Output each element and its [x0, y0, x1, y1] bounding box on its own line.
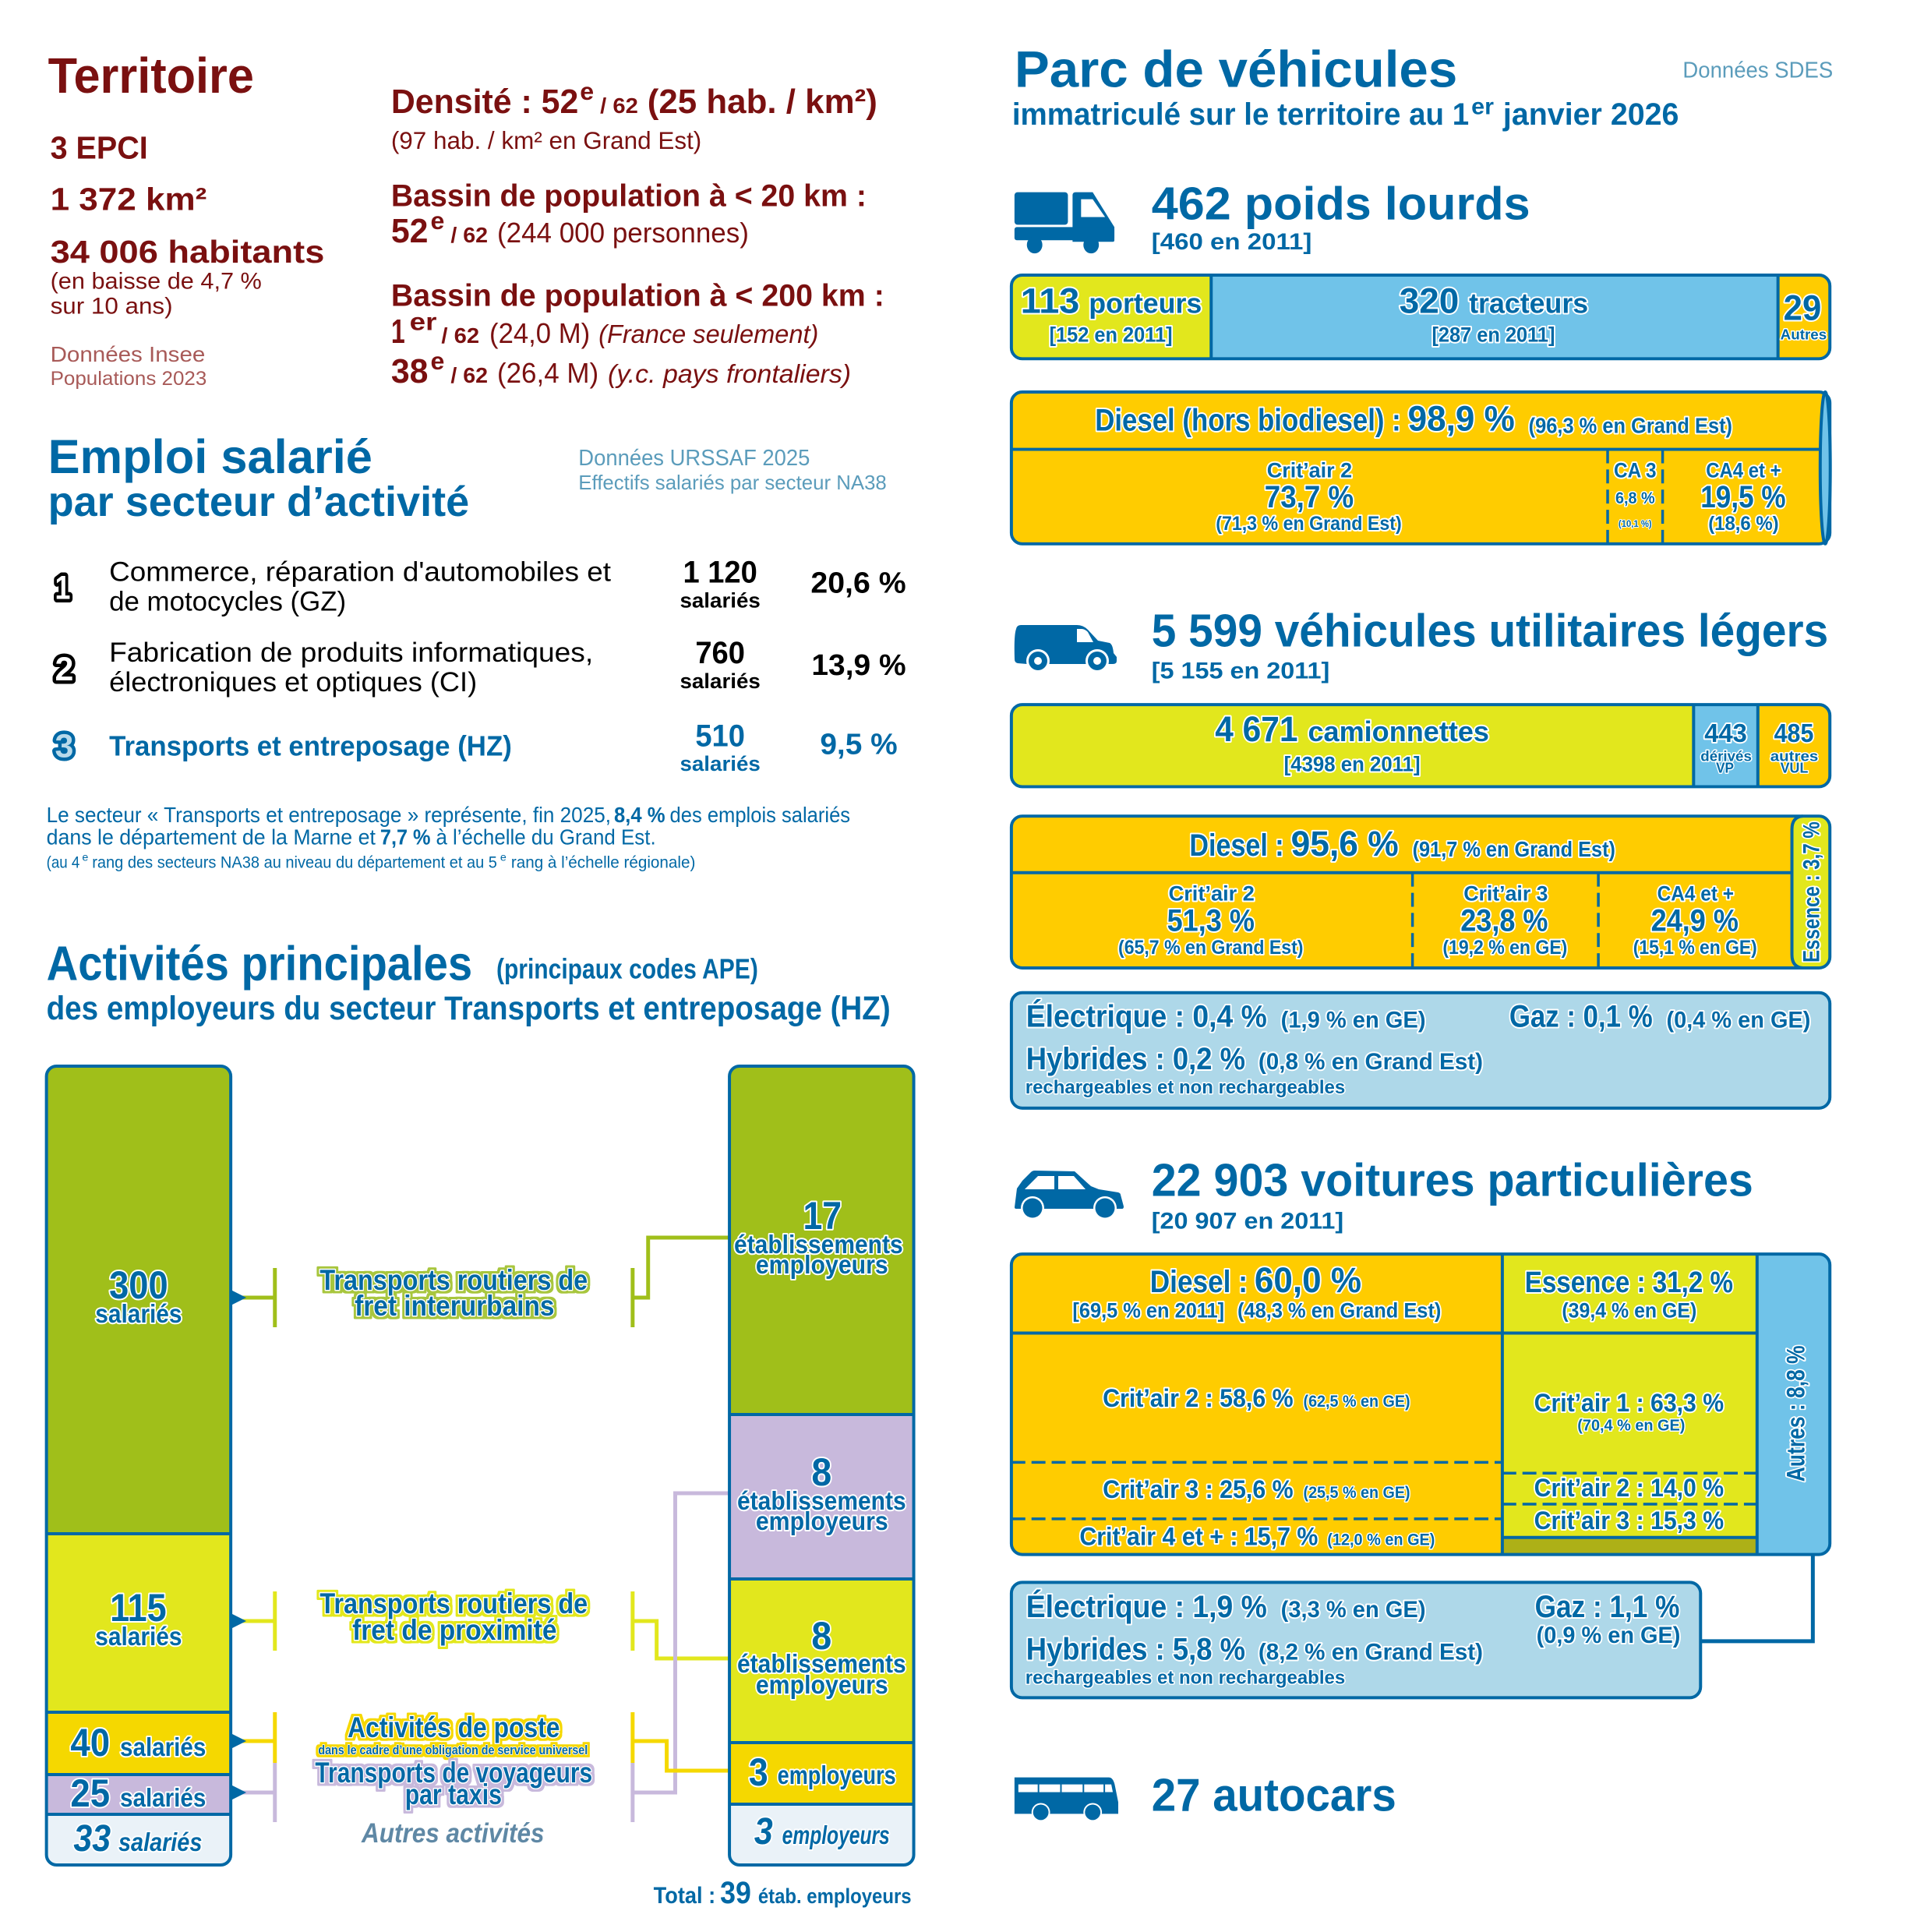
value: 115 salariés: salariés	[95, 1622, 182, 1651]
value: 8 établissements proximité: établissements	[737, 1649, 906, 1678]
segment: CA 3	[1614, 458, 1657, 529]
text: bassin 20 km: (244 000 personnes)	[497, 217, 749, 249]
segment: porteurs: porteurs	[1089, 288, 1202, 320]
heading: activités principales	[47, 936, 891, 1027]
text: total établissements	[654, 1876, 912, 1910]
value: 300 salariés: 300	[109, 1263, 168, 1307]
callout: autres énergies voitures	[1011, 1582, 1700, 1697]
row: transports	[109, 719, 898, 775]
heading: activités principales: Activités principales	[47, 936, 472, 991]
segment: camionnettes: camionnettes	[1308, 716, 1489, 747]
heading: emploi salarié	[48, 430, 469, 525]
value: 115 salariés: 115	[110, 1586, 167, 1630]
row: transports: 9,5 %	[820, 728, 898, 761]
heading: véhicules utilitaires légers: 5 599 véhicules utilitaires légers	[1152, 605, 1828, 657]
icon: autocar	[1015, 1778, 1118, 1821]
segment: dérivés VP: dérivés	[1700, 749, 1752, 765]
panel: activités principales	[47, 936, 914, 1910]
text: note transports: e	[82, 850, 89, 863]
label: transports de voyageurs: Transports de voyageurs	[315, 1757, 592, 1789]
value: 8 établissements proximité: employeurs	[756, 1670, 888, 1699]
segment: autres: 29	[1784, 288, 1821, 328]
callout: autres énergies utilitaires: Gaz : 0,1 %	[1509, 999, 1653, 1033]
segment: diesel: Diesel :	[1150, 1265, 1248, 1299]
text: baisse population: (en baisse de 4,7 %	[51, 269, 262, 295]
segment: diesel crit'air 3: Crit’air 3 : 25,6 %	[1103, 1475, 1294, 1503]
segment: crit'air 2: (71,3 % en Grand Est)	[1216, 514, 1402, 535]
text: densité: e	[580, 77, 594, 105]
heading: poids lourds: [460 en 2011]	[1152, 229, 1311, 255]
segment: diesel: [69,5 % en 2011]	[1072, 1299, 1224, 1323]
text: total établissements: 39	[720, 1876, 751, 1910]
source: URSSAF	[578, 446, 887, 494]
heading: activités principales: des employeurs du secteur Transports et entreposage (HZ)	[47, 990, 891, 1027]
segment: porteurs: 113	[1021, 281, 1079, 321]
callout: autres énergies voitures: Électrique : 1,9 %	[1026, 1588, 1267, 1624]
segment: autres VUL: autres	[1770, 749, 1818, 765]
segment: camionnettes: 4 671	[1215, 709, 1298, 749]
text: baisse population	[51, 269, 262, 319]
text: note transports: Le secteur « Transports et entreposage » représente, fin 2025,	[47, 803, 611, 827]
segment: crit'air 2	[1216, 458, 1402, 535]
heading: autocars: 27 autocars	[1152, 1768, 1396, 1821]
icon: rang 3: 3	[55, 727, 73, 765]
row: commerce: 20,6 %	[810, 567, 906, 600]
text: note transports: à l’échelle du Grand Est.	[436, 825, 656, 849]
callout: autres énergies utilitaires: Hybrides : 0,2 %	[1026, 1042, 1245, 1076]
text: bassin 200 km: / 62	[441, 323, 479, 348]
text: bassin 200 km: (26,4 M)	[497, 358, 598, 389]
chart: barre établissements	[729, 1066, 914, 1865]
icon: voiture	[1015, 1171, 1124, 1220]
heading: véhicules utilitaires légers: [5 155 en 2011]	[1152, 658, 1329, 683]
segment: essence crit'air 2: Crit’air 2 : 14,0 %	[1534, 1473, 1724, 1502]
text: densité: / 62	[600, 94, 638, 118]
row: fabrication: Fabrication de produits informatiques,	[109, 638, 593, 668]
segment: dérivés VP	[1700, 719, 1752, 777]
value: 300 salariés: salariés	[95, 1299, 182, 1328]
segment: essence crit'air 1: (70,4 % en GE)	[1577, 1418, 1685, 1435]
row: commerce: de motocycles (GZ)	[109, 587, 346, 616]
label: fret de proximité	[319, 1588, 588, 1646]
row: commerce: 1 120	[683, 556, 757, 590]
chart: barre salariés	[47, 1066, 231, 1865]
value: 40 salariés: salariés	[120, 1732, 206, 1761]
stat: surface: 1 372 km²	[51, 181, 207, 217]
value: 17 établissements: 17	[803, 1194, 842, 1238]
panel: parc de véhicules	[1011, 41, 1833, 1821]
text: note transports: des emplois salariés	[670, 803, 850, 827]
heading: voitures particulières: [20 907 en 2011]	[1152, 1208, 1343, 1234]
heading: territoire: Territoire	[48, 48, 254, 104]
segment: autres: Autres	[1781, 327, 1827, 343]
segment: crit'air 2: Crit’air 2	[1267, 458, 1352, 482]
segment: diesel: Diesel :	[1189, 828, 1284, 863]
segment: diesel: (48,3 % en Grand Est)	[1237, 1299, 1441, 1323]
row: commerce: salariés	[680, 589, 761, 613]
segment: diesel	[1095, 399, 1732, 439]
value: 8 établissements transports voyageurs: 8	[811, 1450, 831, 1494]
segment: diesel crit'air 3: (25,5 % en GE)	[1304, 1484, 1410, 1502]
segment: diesel crit'air 4: (12,0 % en GE)	[1327, 1531, 1435, 1549]
heading: véhicules utilitaires légers	[1152, 605, 1828, 683]
segment: tracteurs: 320	[1400, 281, 1459, 321]
source: URSSAF: Données URSSAF 2025	[578, 446, 810, 471]
segment: dérivés VP: 443	[1704, 719, 1747, 748]
row: fabrication: salariés	[680, 669, 761, 693]
segment: CA 3: CA 3	[1614, 458, 1657, 482]
text: bassin 20 km: Bassin de population à < 20 km :	[391, 178, 867, 213]
segment: CA4 et +	[1700, 458, 1786, 535]
callout: autres énergies utilitaires: rechargeables et non rechargeables	[1026, 1077, 1345, 1098]
segment: crit'air 2	[1118, 882, 1304, 959]
label: fret de proximité: fret de proximité	[352, 1614, 556, 1646]
row: fabrication: 13,9 %	[811, 649, 906, 682]
text: bassin 200 km: Bassin de population à < 200 km :	[391, 279, 884, 313]
callout: autres énergies utilitaires: Électrique : 0,4 %	[1026, 998, 1267, 1033]
value: 40 salariés	[70, 1721, 206, 1764]
value: 300 salariés	[95, 1263, 182, 1328]
heading: parc de véhicules: er	[1471, 94, 1494, 119]
segment: diesel: 60,0 %	[1255, 1260, 1361, 1300]
value: 33 salariés: 33	[73, 1818, 111, 1860]
text: bassin 200 km: (24,0 M)	[489, 318, 590, 349]
value: 17 établissements: employeurs	[756, 1250, 888, 1279]
chart: connecteurs	[231, 1238, 729, 1822]
segment: CA4 et +	[1633, 882, 1757, 959]
label: autres activités: Autres activités	[361, 1818, 545, 1849]
value: 17 établissements	[734, 1194, 903, 1279]
text: note transports: e	[500, 850, 507, 863]
row: fabrication	[109, 636, 906, 698]
text: note transports: 8,4 %	[614, 803, 665, 827]
heading: voitures particulières	[1152, 1154, 1753, 1234]
text: bassin 200 km: e	[430, 347, 444, 375]
segment: crit'air 3: 23,8 %	[1460, 903, 1548, 938]
callout: autres énergies voitures: (0,9 % en GE)	[1537, 1623, 1680, 1648]
text: total établissements: Total :	[654, 1883, 715, 1909]
label: fret interurbains: fret interurbains	[355, 1290, 554, 1322]
row: commerce	[109, 556, 906, 616]
text: bassin 200 km: (y.c. pays frontaliers)	[608, 359, 851, 389]
segment: essence crit'air 1	[1534, 1388, 1724, 1435]
segment: CA4 et +: CA4 et +	[1706, 458, 1781, 482]
segment: diesel crit'air 2: Crit’air 2 : 58,6 %	[1103, 1383, 1294, 1412]
value: 8 établissements transports voyageurs	[737, 1450, 906, 1535]
segment: diesel: 98,9 %	[1408, 399, 1515, 439]
chart: répartition utilitaires	[1011, 705, 1830, 786]
segment: autres	[1781, 288, 1827, 343]
label: activités de poste: dans le cadre d’une obligation de service universel	[318, 1743, 588, 1757]
connector: autres vers encadré	[1700, 1555, 1813, 1641]
heading: voitures particulières: 22 903 voitures particulières	[1152, 1154, 1753, 1206]
segment: CA4 et +: (18,6 %)	[1708, 514, 1779, 535]
heading: parc de véhicules: immatriculé sur le territoire au 1	[1012, 97, 1469, 132]
heading: emploi salarié: par secteur d’activité	[48, 479, 469, 525]
segment: CA4 et +: CA4 et +	[1657, 882, 1734, 906]
text: densité: (25 hab. / km²)	[648, 83, 877, 121]
chart: libellés activités	[315, 1264, 592, 1849]
callout: autres énergies utilitaires: (1,9 % en GE)	[1281, 1007, 1426, 1033]
source: Insee: Données Insee	[51, 342, 205, 366]
segment: diesel crit'air 2	[1103, 1383, 1410, 1412]
segment: crit'air 3	[1442, 882, 1567, 959]
segment: crit'air 3: Crit’air 3	[1463, 882, 1548, 906]
icon: rang 2: 2	[55, 651, 73, 688]
heading: activités principales: (principaux codes APE)	[496, 954, 758, 985]
text: bassin 200 km: 38	[391, 352, 429, 390]
chart: carburant utilitaires	[1011, 816, 1830, 968]
segment: diesel crit'air 2: (62,5 % en GE)	[1304, 1393, 1410, 1411]
text: note transports: (au 4	[47, 853, 79, 871]
row: fabrication: électroniques et optiques (CI)	[109, 668, 477, 698]
segment: autres VUL: 485	[1774, 719, 1813, 748]
text: bassin 200 km	[391, 279, 884, 390]
segment: essence: Essence : 31,2 %	[1525, 1266, 1733, 1299]
segment: CA4 et +: 24,9 %	[1651, 903, 1739, 938]
value: 3 employeurs poste: 3	[749, 1750, 768, 1794]
value: 3 employeurs autres: 3	[754, 1811, 773, 1853]
segment: autres VUL	[1770, 719, 1818, 777]
segment: crit'air 2: 73,7 %	[1265, 480, 1354, 514]
value: 40 salariés: 40	[70, 1721, 110, 1764]
chart: répartition poids lourds	[1011, 275, 1830, 358]
text: bassin 20 km: 52	[391, 212, 429, 250]
value: 8 établissements transports voyageurs: établissements	[737, 1486, 906, 1515]
icon: utilitaire léger	[1015, 625, 1117, 673]
text: note transports: 7,7 %	[380, 825, 430, 849]
text: bassin 20 km	[391, 178, 867, 250]
label: activités de poste	[318, 1711, 588, 1757]
callout: autres énergies voitures: rechargeables et non rechargeables	[1026, 1667, 1345, 1688]
text: note transports: rang des secteurs NA38 au niveau du département et au 5	[92, 853, 497, 871]
panel: territoire	[48, 48, 884, 390]
chart: carburant poids lourds	[1011, 392, 1830, 544]
segment: essence: (39,4 % en GE)	[1562, 1299, 1696, 1323]
segment: crit'air 2: (65,7 % en Grand Est)	[1118, 938, 1304, 959]
segment: CA4 et +: (15,1 % en GE)	[1633, 938, 1757, 959]
label: transports de voyageurs	[315, 1757, 592, 1810]
segment: diesel	[1072, 1260, 1441, 1323]
heading: emploi salarié: Emploi salarié	[48, 430, 372, 484]
row: commerce: Commerce, réparation d'automobiles et	[109, 558, 611, 588]
segment: camionnettes: [4398 en 2011]	[1284, 753, 1421, 776]
value: 8 établissements proximité	[737, 1614, 906, 1699]
segment: tracteurs	[1400, 281, 1588, 346]
value: 3 employeurs poste: employeurs	[778, 1761, 896, 1789]
segment: autres VUL: VUL	[1781, 761, 1808, 777]
label: fret de proximité: Transports routiers de	[319, 1588, 588, 1619]
value: 25 salariés: 25	[70, 1771, 110, 1815]
text: bassin 200 km: 1	[391, 313, 405, 351]
callout: autres énergies voitures: (3,3 % en GE)	[1281, 1597, 1426, 1623]
segment: crit'air 3: (19,2 % en GE)	[1442, 938, 1567, 959]
value: 17 établissements: établissements	[734, 1230, 903, 1259]
segment: tracteurs: [287 en 2011]	[1431, 323, 1555, 346]
heading: poids lourds: 462 poids lourds	[1152, 177, 1530, 229]
segment: autres: Autres : 8,8 %	[1781, 1345, 1809, 1482]
segment: crit'air 2: 51,3 %	[1167, 903, 1255, 938]
callout: autres énergies voitures: Hybrides : 5,8 %	[1026, 1633, 1245, 1667]
segment: diesel: (96,3 % en Grand Est)	[1529, 414, 1732, 438]
value: 115 salariés	[95, 1586, 182, 1651]
segment: diesel crit'air 3	[1103, 1475, 1410, 1503]
stat: habitants: 34 006 habitants	[51, 234, 324, 270]
value: 33 salariés	[73, 1818, 202, 1860]
row: fabrication: 760	[695, 636, 745, 670]
callout: autres énergies utilitaires: (0,8 % en Grand Est)	[1259, 1049, 1483, 1075]
callout: autres énergies voitures: Gaz : 1,1 %	[1535, 1590, 1679, 1624]
text: bassin 200 km: (France seulement)	[598, 320, 818, 349]
panel: emploi salarié	[47, 430, 906, 871]
text: note transports: dans le département de la Marne et	[47, 825, 376, 849]
callout: autres énergies utilitaires: (0,4 % en GE)	[1667, 1007, 1810, 1033]
segment: essence: Essence : 3,7 %	[1799, 821, 1824, 962]
value: 33 salariés: salariés	[118, 1828, 202, 1856]
row: transports: 510	[695, 719, 745, 753]
source: URSSAF: Effectifs salariés par secteur NA38	[578, 472, 887, 494]
heading: parc de véhicules	[1012, 41, 1679, 132]
segment: diesel: (91,7 % en Grand Est)	[1413, 837, 1615, 861]
text: note transports	[47, 803, 850, 871]
text: note transports: rang à l’échelle régionale)	[511, 853, 695, 871]
segment: crit'air 2: Crit’air 2	[1169, 882, 1255, 906]
source: Insee	[51, 342, 207, 390]
stat: EPCI: 3 EPCI	[51, 130, 148, 166]
segment: essence crit'air 3: Crit’air 3 : 15,3 %	[1534, 1506, 1724, 1535]
value: 3 employeurs autres: employeurs	[782, 1821, 890, 1849]
segment: diesel: 95,6 %	[1291, 824, 1399, 864]
segment: porteurs: [152 en 2011]	[1050, 323, 1173, 346]
label: activités de poste: Activités de poste	[348, 1711, 560, 1743]
callout: autres énergies utilitaires	[1011, 993, 1830, 1108]
source: Insee: Populations 2023	[51, 369, 207, 390]
value: 3 employeurs poste	[749, 1750, 896, 1794]
text: bassin 20 km: / 62	[450, 223, 488, 247]
text: total établissements: étab. employeurs	[758, 1884, 912, 1908]
value: 25 salariés: salariés	[120, 1783, 206, 1812]
label: fret interurbains: Transports routiers de	[319, 1264, 588, 1296]
value: 25 salariés	[70, 1771, 206, 1815]
segment: porteurs	[1021, 281, 1202, 346]
segment: essence crit'air 1: Crit’air 1 : 63,3 %	[1534, 1388, 1724, 1417]
text: bassin 20 km: e	[430, 207, 444, 235]
segment: diesel: Diesel (hors biodiesel) :	[1095, 404, 1401, 438]
row: transports: salariés	[680, 752, 761, 775]
label: transports de voyageurs: par taxis	[405, 1778, 502, 1810]
text: densité: (97 hab. / km² en Grand Est)	[391, 126, 701, 154]
value: 8 établissements proximité: 8	[811, 1614, 831, 1658]
segment: diesel crit'air 4: Crit’air 4 et + : 15,7 %	[1079, 1522, 1318, 1551]
segment: tracteurs: tracteurs	[1469, 288, 1588, 320]
source: SDES: Données SDES	[1682, 58, 1833, 83]
row: transports: Transports et entreposage (HZ)	[109, 730, 512, 761]
callout: autres énergies voitures: (8,2 % en Grand Est)	[1259, 1640, 1483, 1665]
text: baisse population: sur 10 ans)	[51, 293, 173, 319]
heading: poids lourds	[1152, 177, 1530, 255]
segment: diesel	[1189, 824, 1615, 864]
value: 3 employeurs autres	[754, 1811, 890, 1853]
text: bassin 200 km: / 62	[450, 363, 488, 387]
heading: parc de véhicules: Parc de véhicules	[1015, 41, 1457, 97]
text: bassin 200 km: er	[410, 307, 436, 335]
value: 8 établissements transports voyageurs: employeurs	[756, 1506, 888, 1535]
segment: CA 3: 6,8 %	[1615, 489, 1655, 507]
chart: carburant voitures	[1011, 1254, 1830, 1555]
segment: CA4 et +: 19,5 %	[1700, 480, 1786, 514]
icon: rang 1: 1	[55, 570, 70, 607]
segment: dérivés VP: VP	[1716, 761, 1734, 777]
text: densité	[391, 77, 877, 154]
label: fret interurbains	[319, 1264, 588, 1322]
segment: CA 3: (10,1 %)	[1619, 518, 1652, 529]
segment: essence	[1525, 1266, 1733, 1323]
segment: camionnettes	[1215, 709, 1489, 776]
text: densité: Densité : 52	[391, 83, 578, 121]
icon: poids lourd	[1015, 192, 1114, 253]
heading: parc de véhicules: janvier 2026	[1502, 97, 1679, 132]
